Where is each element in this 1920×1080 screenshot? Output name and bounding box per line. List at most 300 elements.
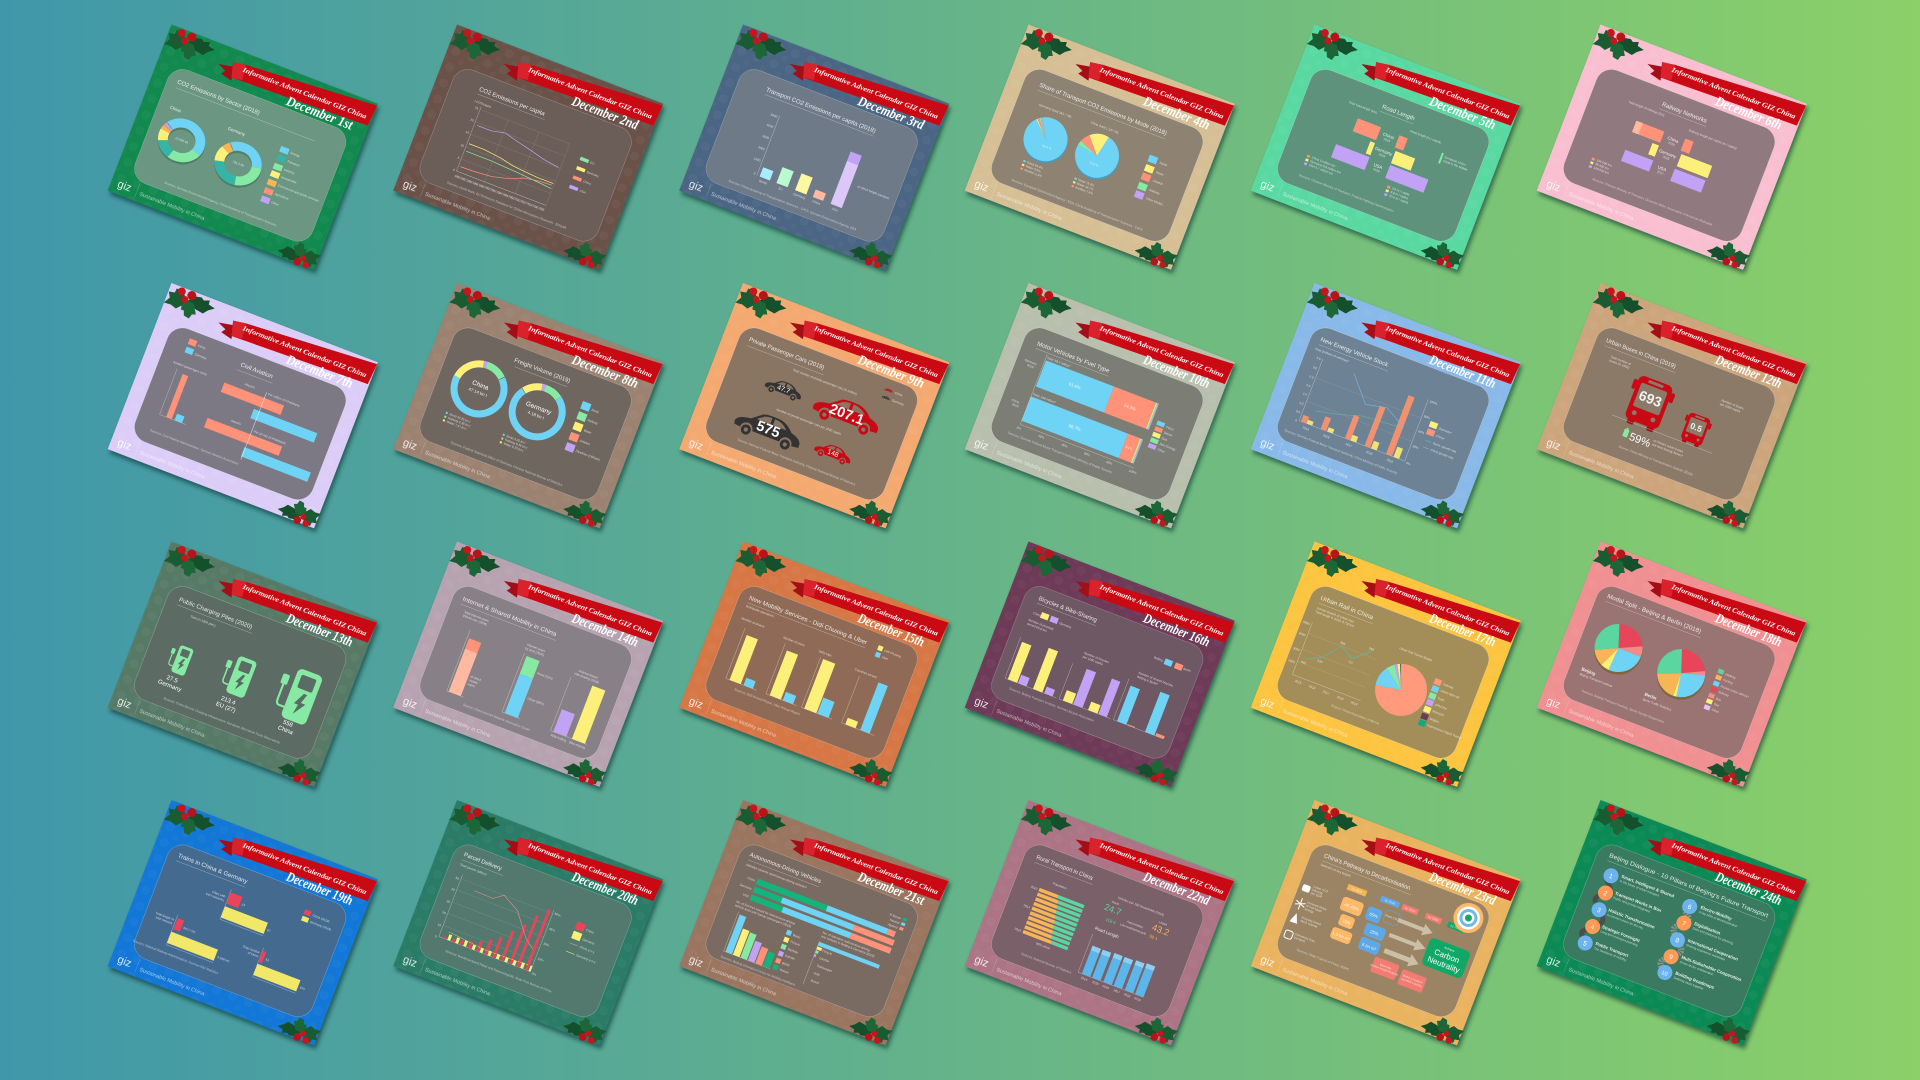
- date: December 23rd: [1426, 870, 1498, 909]
- target icon: [1449, 899, 1488, 937]
- subtitle: Attitudes towards autonomous-driving vehicles*: [745, 863, 808, 890]
- source: Sources: World Bank, EU Emissions Database for Global Atmospheric Research - EDGAR: [446, 180, 568, 230]
- giz logo: giz: [687, 178, 705, 194]
- pillars 1 to 5: Long-term transport planning: [1600, 929, 1639, 947]
- source: Sources: National Railway Administration, German Rail Statistics: [132, 939, 219, 975]
- ribbon heading: Informative Advent Calendar GIZ China: [1384, 324, 1511, 379]
- combo chart: 30%: [1412, 444, 1419, 450]
- red boxes: socialist country: [1401, 977, 1423, 988]
- title: New Mobility Services - Didi Chuxing & Uber: [748, 596, 868, 646]
- legend: [301, 909, 335, 932]
- stat: urban: [1148, 918, 1172, 944]
- date: December 18th: [1712, 611, 1784, 651]
- giz logo: giz: [1545, 178, 1562, 194]
- axis: 80%: [1106, 460, 1113, 466]
- giz logo: giz: [1545, 954, 1562, 970]
- ribbon heading: Informative Advent Calendar GIZ China: [241, 583, 368, 638]
- legend: licences: Baidu: [792, 933, 801, 940]
- combo chart: 0.5: [1295, 409, 1301, 414]
- title: Trains in China & Germany: [177, 853, 248, 885]
- combo chart: 0%: [531, 971, 537, 977]
- pillars 6 to 10: 7: [1681, 920, 1687, 928]
- length per capita bars: [1383, 135, 1440, 193]
- legend: APM line: [1434, 703, 1448, 711]
- country labels: China: [1382, 132, 1395, 141]
- date: December 24th: [1712, 870, 1784, 909]
- donut chart: China: 47.14 bn t: [468, 386, 488, 398]
- giz logo: giz: [973, 695, 990, 711]
- title: Rural Transport in China: [1035, 855, 1094, 882]
- small legends: Water 7.47 bn t: [446, 420, 467, 431]
- card: December 22nd rural transport: [955, 787, 1244, 1058]
- stat: rural: Rural: [1111, 900, 1120, 906]
- legend: Gas: [1161, 436, 1168, 442]
- bars: total number: of trains: [247, 951, 259, 958]
- bar chart: of which freight transport: [857, 184, 890, 200]
- ribbon heading: Informative Advent Calendar GIZ China: [1384, 841, 1511, 896]
- 2020 target boxes: 40-45%: [1344, 902, 1360, 912]
- stat: rural: 118.4: [1105, 917, 1117, 925]
- pillars 6 to 10: Defining steps together: [1673, 976, 1704, 991]
- label: EU: 213.4: [220, 696, 237, 707]
- tagline: Sustainable Mobility in China: [995, 192, 1062, 222]
- ribbon heading: Informative Advent Calendar GIZ China: [1670, 583, 1797, 638]
- chart: users by area: by area (2020): [525, 646, 545, 657]
- legend: [1418, 678, 1478, 741]
- subheading: total cars: Total number of private passenger cars (in million): [792, 368, 858, 396]
- small legends: Road 3.25 bn t: [506, 434, 526, 445]
- red boxes: Basically: [1379, 962, 1392, 971]
- legend: Walking: [1725, 672, 1736, 680]
- ribbon heading: Informative Advent Calendar GIZ China: [1098, 583, 1225, 638]
- pillars 6 to 10: [1655, 897, 1762, 1006]
- 2030 target boxes: 25%: [1369, 929, 1379, 937]
- legend: China: [583, 179, 592, 186]
- row labels: Lower CO2: [1313, 885, 1329, 894]
- legend: Road: [1159, 161, 1168, 167]
- tagline: Sustainable Mobility in China: [138, 709, 205, 739]
- line chart: 15: [465, 130, 470, 135]
- country labels: 2019: [1668, 141, 1676, 147]
- bar chart: licences: No. of licences issued for autonomous-driving: [736, 899, 796, 926]
- stat: urban: 99.1: [1149, 934, 1159, 942]
- pie legend: China: Road 73.3%: [1077, 178, 1095, 188]
- combo chart: 80%: [1423, 414, 1431, 420]
- giz logo: giz: [1259, 695, 1276, 711]
- legend: China: [585, 928, 595, 935]
- legend: New Energy: [1159, 442, 1177, 452]
- tagline: Sustainable Mobility in China: [1567, 192, 1634, 222]
- stacked bars: attitudes: Germany: [739, 883, 753, 891]
- card: December 18th modal split Beijing and Berlin: [1527, 529, 1816, 800]
- tagline: Sustainable Mobility in China: [138, 450, 205, 480]
- small legend: USA 6.7 million km: [1308, 163, 1334, 176]
- legend: Maglev: [1429, 717, 1440, 724]
- 2030 target boxes: [1354, 903, 1401, 959]
- source: Sources: European Environment Agency - EEA, China Academy of Transportation Sciences - CATS: [1011, 178, 1143, 232]
- label: China: China: [277, 725, 294, 737]
- combo chart: [432, 863, 566, 978]
- carbon neutrality box: Carbon: [1433, 947, 1461, 965]
- legend: cities: Beijing: [1153, 655, 1164, 662]
- statistic note: of China's urban buses: [1653, 439, 1684, 454]
- date: December 2nd: [569, 94, 641, 134]
- legend: Commercial and public services: [277, 183, 320, 203]
- pillars 6 to 10: A key pillar of decarbonisation: [1698, 910, 1738, 928]
- country labels: 2018: [1372, 167, 1381, 174]
- note: European Union: [1444, 155, 1467, 167]
- combo chart: 45%: [548, 927, 556, 933]
- tagline: Sustainable Mobility in China: [424, 450, 491, 480]
- bar chart: EU: [778, 186, 783, 192]
- small legend: 3.6 m / capita: [1391, 186, 1410, 197]
- bus icon: 693: [1619, 373, 1678, 435]
- small legends: [442, 411, 529, 454]
- legend: licences: WeRide: [787, 947, 799, 955]
- row icons: [1282, 883, 1312, 940]
- combo chart: 100%: [1429, 399, 1438, 406]
- stat: rural: [1100, 898, 1124, 926]
- country labels: China: [1667, 135, 1680, 144]
- source: Sources: German Federal Motor Transport Authority, China Ministry of Public Security: [1284, 428, 1398, 475]
- line chart: 4000: [1298, 631, 1306, 637]
- total length bars: [1331, 114, 1381, 170]
- giz logo: giz: [401, 437, 419, 453]
- donut chart: China: China: [471, 379, 490, 392]
- label: buses per capita: per 1000 capita: [1719, 402, 1741, 414]
- bars: cities with subway: 87: [267, 928, 271, 933]
- tagline: Sustainable Mobility in China: [1567, 967, 1634, 997]
- battery icon: [1622, 427, 1630, 438]
- legend: Railway: [1149, 188, 1161, 196]
- combo chart: Total (millions of vehicles)*: [1314, 347, 1351, 364]
- country labels: Germany: [1374, 146, 1394, 157]
- pie heading: Urban Rail Transit Modes: [1399, 646, 1433, 663]
- row labels: per GDP: [1310, 891, 1323, 899]
- stat: rural: 24.7: [1103, 902, 1123, 917]
- legend: attitudes: Neutral: [889, 918, 900, 925]
- legend: [1703, 668, 1755, 722]
- pillars 1 to 5: Transport Works in Box: [1614, 891, 1663, 913]
- ribbon heading: Informative Advent Calendar GIZ China: [812, 583, 940, 638]
- target ribbons: by 2035: [1404, 906, 1416, 914]
- pillars 1 to 5: The backbone of mobility: [1593, 946, 1627, 962]
- line chart: 5: [457, 156, 460, 160]
- date: December 19th: [283, 870, 355, 909]
- ribbon heading: Informative Advent Calendar GIZ China: [812, 841, 940, 896]
- pie legend: China: [1071, 176, 1097, 196]
- Germany label: Germany: [227, 126, 247, 137]
- legend: [1420, 421, 1464, 461]
- charger icon: EU: [217, 652, 258, 699]
- source: Sources: German Federal Motor Transport Authority, Ministry of Public Security: [1007, 431, 1113, 474]
- total length bars: [1621, 121, 1664, 172]
- tagline: Sustainable Mobility in China: [138, 192, 205, 222]
- small legend: 38 400 km: [1594, 162, 1610, 171]
- winding road: left: [1579, 873, 1619, 946]
- legend: licences: Daimler: [784, 954, 796, 961]
- giz logo: giz: [1545, 695, 1562, 711]
- donut chart: Germany: 755.4 Mt: [232, 160, 245, 168]
- bar chart: Daily trips: [818, 649, 833, 658]
- legend: cities: [1153, 654, 1192, 674]
- subtitle: Selection of key targets: [1320, 863, 1352, 878]
- giz logo: giz: [687, 954, 705, 970]
- title: Urban Rail in China: [1319, 596, 1375, 622]
- stacked bars: attitudes: China: [747, 876, 756, 883]
- stacked bar: China: Total: 348 million*: [1032, 392, 1057, 405]
- airport and flight bars: Airports: [230, 419, 242, 426]
- stacked bars: attitudes: [736, 873, 898, 954]
- title: Public Charging Piles (2020): [178, 597, 253, 631]
- legend: Railway: [587, 418, 599, 426]
- stat: urban: 43.2: [1151, 922, 1171, 938]
- title: Autonomous-Driving Vehicles: [749, 852, 822, 885]
- ribbon heading: Informative Advent Calendar GIZ China: [1670, 324, 1797, 379]
- legend: China (2019): [312, 913, 330, 923]
- title: Motor Vehicles by Fuel Type: [1036, 341, 1111, 375]
- tagline: Sustainable Mobility in China: [1567, 709, 1634, 739]
- 2030 target boxes: Peak CO2: [1385, 913, 1400, 922]
- legend: [569, 157, 603, 197]
- tagline: Sustainable Mobility in China: [1281, 967, 1348, 997]
- small legend: China 5 million km: [1311, 155, 1336, 168]
- ribbon heading: Informative Advent Calendar GIZ China: [1384, 583, 1511, 638]
- subheading: cars per capita: Number of private passenger cars per 1000 capita: [776, 408, 842, 436]
- legend: Agriculture: [274, 192, 289, 201]
- card: December 21st autonomous driving vehicles: [670, 787, 959, 1058]
- pie label: China: China (total 1 157 Mt): [1090, 120, 1119, 135]
- date: December 16th: [1140, 611, 1212, 651]
- title: Modal Split - Beijing & Berlin (2018): [1606, 594, 1702, 635]
- legend: Subway: [1718, 690, 1730, 698]
- passenger bar chart: Aviation passengers (mio): [173, 360, 207, 377]
- legend: Diesel: [1163, 431, 1173, 438]
- axis: 40%: [1061, 443, 1068, 449]
- legend: Germany: [586, 170, 600, 178]
- ribbon heading: Informative Advent Calendar GIZ China: [1098, 324, 1225, 379]
- arrow 3: [1382, 944, 1421, 970]
- legend: [260, 146, 333, 221]
- legend: Germany (2019): [309, 920, 332, 932]
- bar chart: [1005, 617, 1187, 739]
- bar chart: 5000: [770, 113, 778, 119]
- source: Source: China Internet Network Information Center: [462, 703, 532, 732]
- combo chart: 40: [451, 887, 456, 892]
- pillars 1 to 5: Strategic Foresight: [1601, 924, 1641, 943]
- bars: total number: [234, 941, 314, 996]
- bars: total number: 53: [265, 957, 270, 963]
- giz logo: giz: [973, 178, 990, 194]
- pie legend: Germany: Water 0.9%: [1025, 164, 1042, 174]
- giz logo: giz: [1259, 954, 1276, 970]
- legend: cities: Berlin: [1183, 667, 1192, 673]
- legend: Transport: [287, 159, 300, 168]
- giz logo: giz: [116, 178, 133, 194]
- title: Transport CO2 Emissions per capita (2018): [765, 87, 876, 135]
- donut chart: China: [433, 343, 525, 435]
- ribbon heading: Informative Advent Calendar GIZ China: [1098, 66, 1225, 121]
- airport and flight bars: Airports: [244, 382, 256, 390]
- donut chart: Germany: Germany: [525, 400, 553, 417]
- axis: [1016, 354, 1165, 475]
- bar chart: Countries served: [854, 667, 878, 679]
- legend: Uber: [881, 655, 889, 661]
- right column heading: Railway length per capita (m / capita): [1688, 128, 1737, 150]
- subheading: road length: Road Length: [1094, 926, 1120, 939]
- 2020 target boxes: 15%: [1341, 918, 1351, 926]
- target ribbons: [1347, 883, 1465, 934]
- bar chart: China: [812, 199, 821, 206]
- bar chart: operators: No. of operators autonomous-driving: [822, 931, 871, 952]
- bars: total length: Total length of: [155, 911, 175, 922]
- combo chart: Total parcels (billion): [459, 863, 487, 876]
- pillars 6 to 10: 10: [1660, 970, 1668, 978]
- legend: Other: [1157, 447, 1165, 454]
- tagline: Sustainable Mobility in China: [424, 192, 491, 222]
- stacked bar: China: China: [1011, 398, 1020, 405]
- pillars 1 to 5: 1: [1608, 873, 1614, 881]
- source: Sources: German Environmental Agency, China Academy of Transportation Sciences: [164, 181, 278, 227]
- chart: ride sharing: Bike sharing: [568, 740, 586, 750]
- donut chart: China: 10 065 Mt: [175, 136, 189, 145]
- line chart: t CO2/capita: [474, 99, 492, 109]
- pie legend: China: Aviation 7.5%: [1075, 185, 1094, 196]
- bar chart: operators: Bosch: [810, 978, 820, 985]
- car: China total: 207.1: [827, 401, 866, 429]
- source: Sources: Federal Statistical Office of Germany, Chinese National Bureau of Statistics: [450, 440, 563, 487]
- tagline: Sustainable Mobility in China: [995, 450, 1062, 480]
- label: vehicle types: Low-end/motorcycle: [1120, 922, 1147, 936]
- legend: Germ. growth rate: [1432, 441, 1457, 454]
- label: China: 558: [282, 720, 294, 729]
- ribbon heading: Informative Advent Calendar GIZ China: [1098, 841, 1225, 896]
- bars: total length: train network: [155, 915, 173, 926]
- title: CO2 Emissions per capita: [478, 87, 546, 118]
- legend: Water: [583, 428, 592, 435]
- pillars 1 to 5: 4: [1589, 924, 1596, 932]
- combo chart: 60%: [554, 912, 562, 918]
- source: Source: German Federal Motor Transport Authority, Chinese National Bureau of Statistics: [737, 438, 856, 487]
- bar chart: operators: Daimler: [819, 956, 830, 964]
- source: Sources: China Academy of Transportation Sciences - CATS, German Environment Agency, EEA: [728, 179, 858, 232]
- label: EU: EU (27): [215, 701, 236, 714]
- bar chart: 4000: [766, 123, 774, 129]
- bar chart: per 1000 capita: [1082, 655, 1104, 666]
- small legends: Railway 0.36 bn t: [504, 438, 528, 450]
- row labels: stock volume: [1300, 919, 1318, 929]
- line chart: 0: [452, 168, 456, 172]
- date: December 9th: [855, 353, 926, 392]
- title: Road Length: [1381, 104, 1415, 122]
- bars: cities with subway: 14: [241, 902, 246, 907]
- title: Railway Networks: [1661, 102, 1708, 125]
- tagline: Sustainable Mobility in China: [710, 709, 777, 739]
- date: December 1st: [283, 94, 356, 134]
- small legend: 150 000 km: [1593, 166, 1610, 175]
- stacked bar: China: [1006, 386, 1145, 464]
- giz logo: giz: [687, 695, 705, 711]
- combo chart: 2.5: [1309, 375, 1314, 380]
- chart: internet users: Total internet users: [464, 610, 490, 623]
- chart: internet users: [436, 610, 503, 701]
- axis: 0%: [1016, 426, 1022, 431]
- legend: Petrol: [1165, 425, 1175, 432]
- combo chart: 2016: [1322, 433, 1330, 440]
- airport and flight bars: Per 10 mio of inhabitants: [253, 429, 287, 446]
- title: Internet & Shared Mobility in China: [462, 597, 558, 638]
- legend: [564, 401, 617, 463]
- tagline: Sustainable Mobility in China: [995, 967, 1062, 997]
- legend: Private motor vehicle*: [1720, 684, 1750, 699]
- subtitle: Total length in 2019: 6,730 km: [1315, 610, 1355, 628]
- giz logo: giz: [401, 954, 419, 970]
- country labels: Germany: [1658, 148, 1678, 160]
- 2030 target boxes: 6 bn m³: [1361, 942, 1377, 952]
- label: Germany: Germany: [157, 679, 182, 694]
- car: Germany per capita: [731, 404, 805, 454]
- line chart: 545: [1300, 660, 1307, 665]
- bar chart: Beijing & Berlin*: [1137, 675, 1160, 687]
- title: Urban Buses in China (2019): [1605, 338, 1676, 370]
- legend: Water: [1155, 170, 1164, 177]
- legend: Aviation: [579, 439, 591, 446]
- subtitle: Annual Growth of Urban Rail: [1316, 606, 1355, 624]
- pie legend: Germany: [1020, 159, 1046, 178]
- label: Germany: 27.5: [165, 675, 179, 685]
- combo chart: 10: [437, 922, 442, 928]
- legend: EU: [590, 161, 595, 166]
- car: Germany per capita: 575: [754, 418, 782, 442]
- bar chart: Number of shared bicycles: [1138, 671, 1174, 688]
- bars: total length: [146, 907, 239, 968]
- card: December 12th urban buses: [1527, 270, 1816, 541]
- bar chart: rural road length: 2015: [1091, 980, 1100, 986]
- legend: Road: [591, 408, 599, 414]
- stacked bar: Germany: 2019: [1026, 363, 1034, 369]
- ribbon heading: Informative Advent Calendar GIZ China: [812, 66, 940, 121]
- legend: Tram: [1437, 696, 1445, 703]
- card: December 8th freight volume: [384, 270, 673, 541]
- card: December 2nd CO2 emissions per capita: [384, 12, 673, 283]
- line chart: 969: [1369, 646, 1375, 652]
- source: Sources: DiDi Annual Report, Uber Annual Report: [734, 687, 801, 716]
- small legend: 9.8 m / capita: [1390, 190, 1409, 201]
- target ribbons: by 2060: [1450, 923, 1462, 931]
- subheading: Population: [1052, 881, 1068, 891]
- combo chart: 1.0: [1299, 401, 1304, 406]
- date: December 15th: [855, 611, 926, 651]
- legend: [565, 921, 607, 964]
- red boxes: [1368, 956, 1428, 993]
- legend: licences: Nissan: [779, 968, 790, 975]
- tagline: Sustainable Mobility in China: [424, 967, 491, 997]
- pillars 1 to 5: Public and private integrated: [1613, 896, 1651, 914]
- row labels: Emissions from: [1294, 932, 1316, 944]
- card: December 16th bicycles and bike-sharing: [955, 529, 1244, 800]
- stacked bars: urban and rural population: 60% urban: [1035, 941, 1051, 951]
- country labels: USA: [1373, 162, 1383, 170]
- ribbon heading: Informative Advent Calendar GIZ China: [241, 841, 368, 896]
- line chart: 10: [460, 143, 465, 148]
- city notes: Berlin Traffic Statistics: [1642, 697, 1672, 712]
- ribbon heading: Informative Advent Calendar GIZ China: [526, 583, 654, 638]
- stacked bar: China: 88.7%: [1068, 423, 1082, 432]
- statistic: 59%: [1627, 431, 1652, 450]
- country labels: [1651, 134, 1683, 178]
- ribbon heading: Informative Advent Calendar GIZ China: [812, 324, 940, 379]
- bar chart: operators: Pony.ai: [822, 949, 833, 956]
